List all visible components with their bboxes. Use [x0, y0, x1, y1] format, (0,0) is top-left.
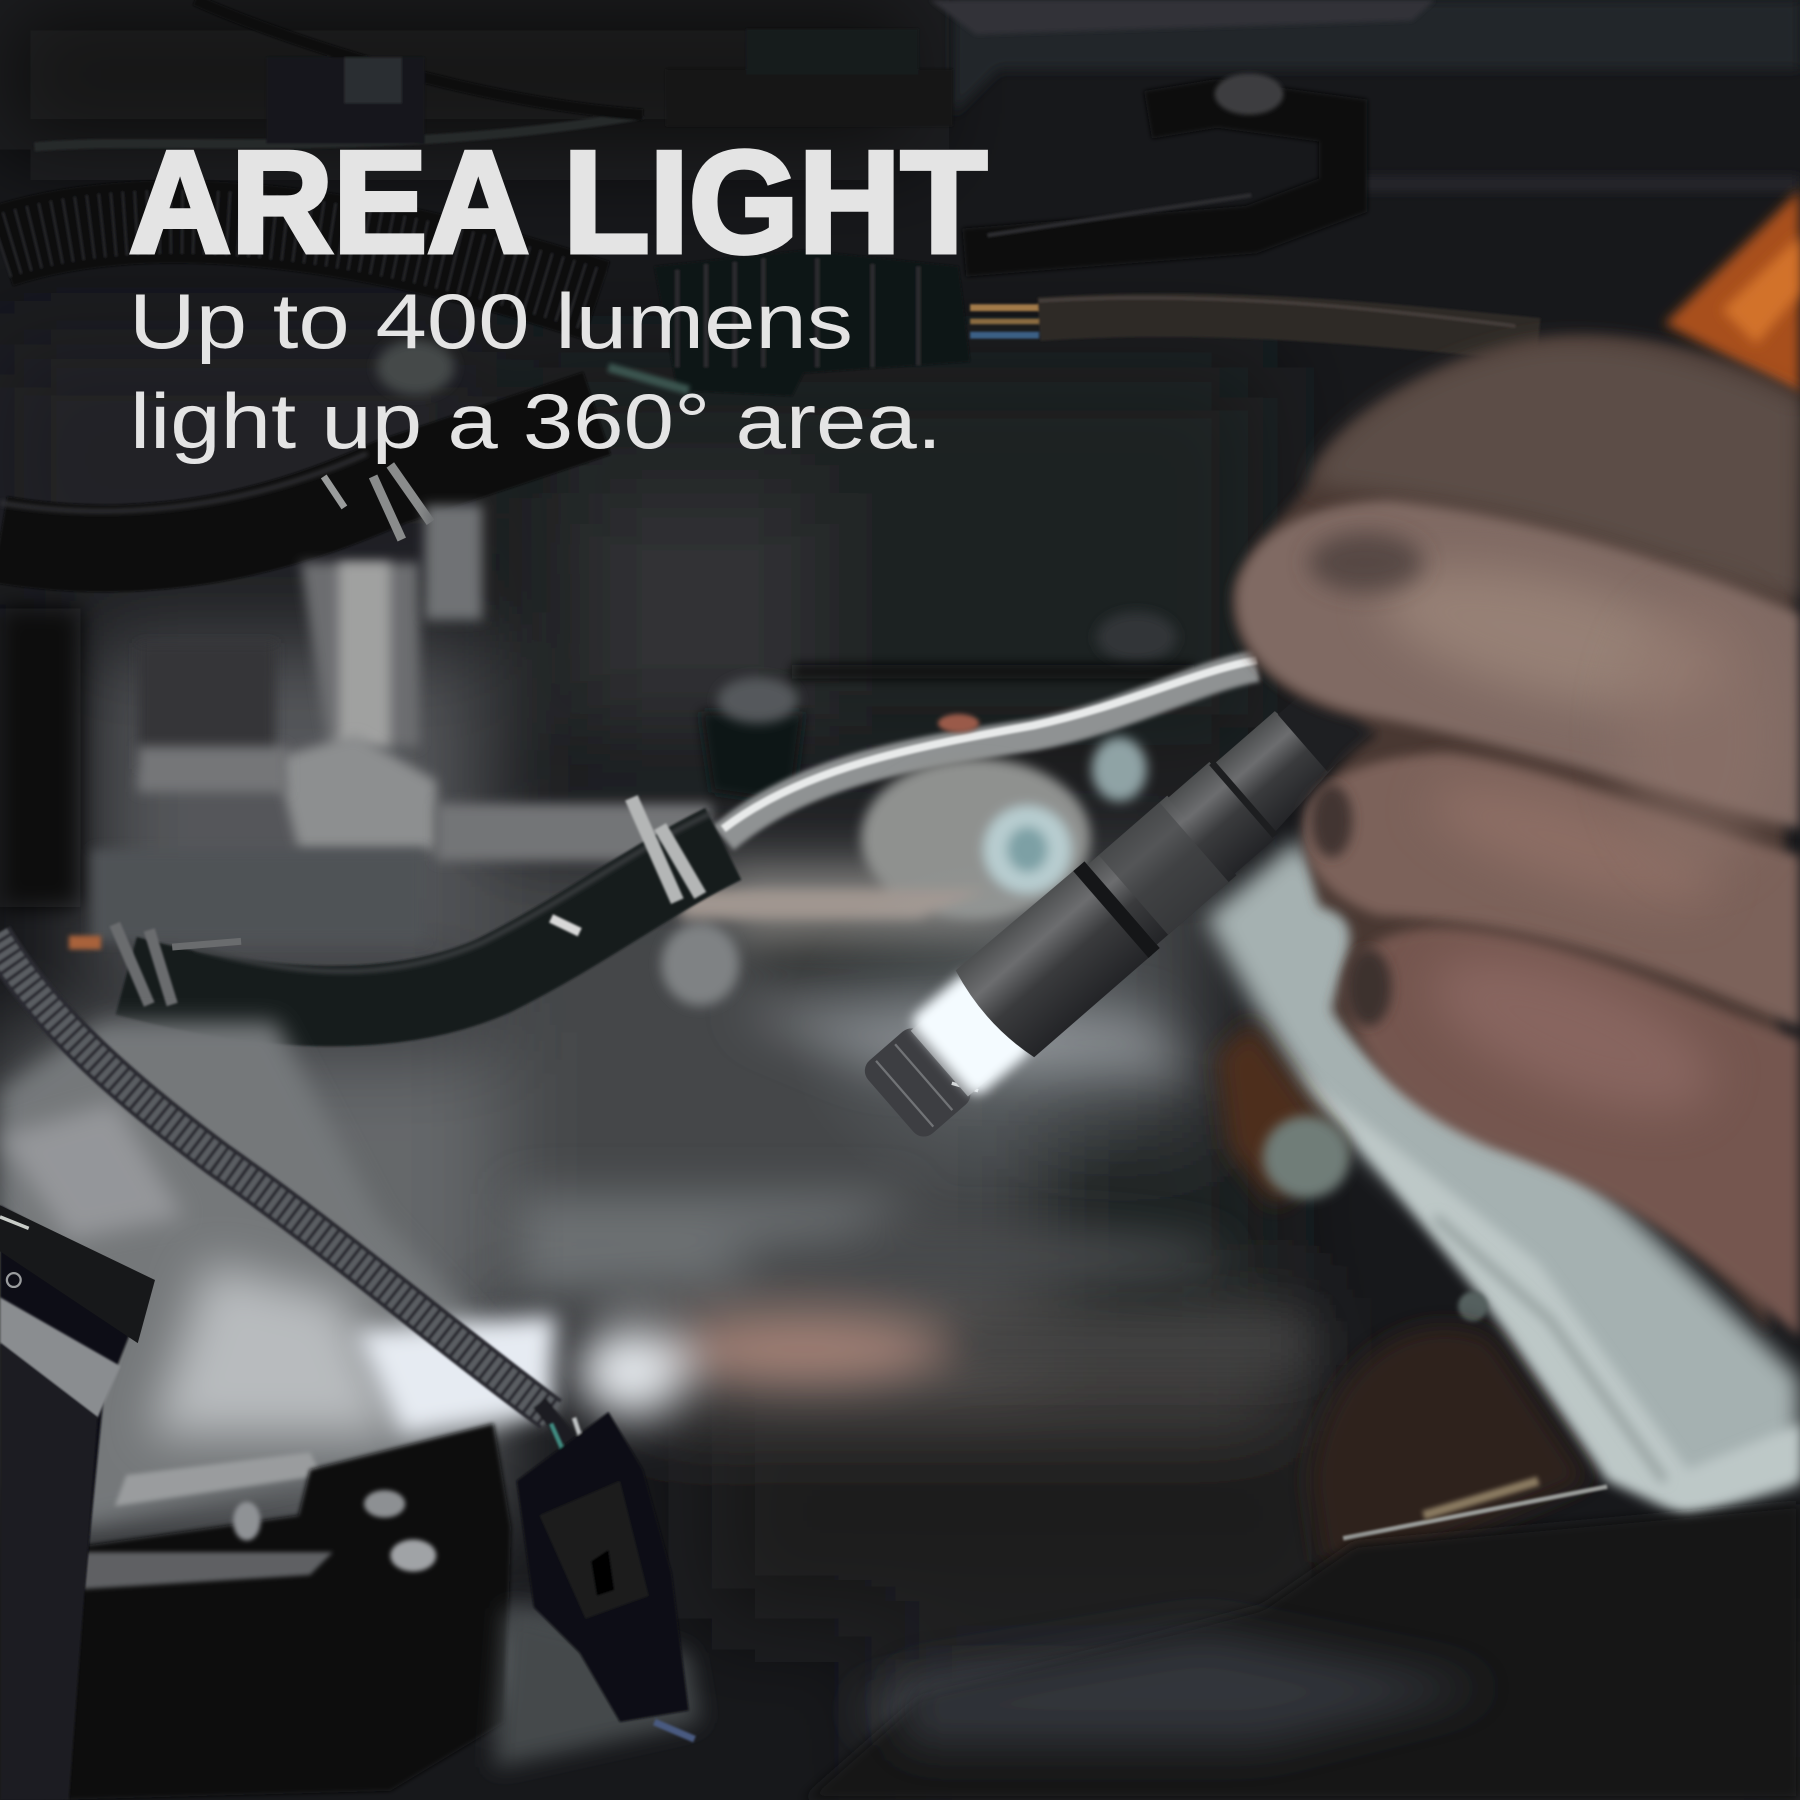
ring finger	[1303, 753, 1800, 1027]
wiring connector	[654, 250, 1538, 396]
subtitle: light up a 360° area.	[130, 377, 942, 465]
black rubber hose	[69, 798, 723, 1006]
index finger	[1311, 341, 1800, 603]
title: AREA LIGHT	[129, 121, 987, 283]
palm mass	[1233, 336, 1800, 1332]
top right dark engine cover	[930, 0, 1800, 253]
silver lower left engine block	[0, 1022, 557, 1527]
subtitle	[129, 277, 942, 465]
subtitle: Up to 400 lumens	[129, 277, 853, 365]
light glow around flashlight	[786, 861, 1200, 1205]
upper black hose with clamp	[0, 340, 689, 548]
lower left machinery	[46, 1424, 700, 1800]
little finger	[1347, 928, 1800, 1337]
round pulley and bolt	[661, 737, 1147, 1006]
rust coloured parts	[804, 1022, 1800, 1800]
bright silver bracket	[723, 660, 1257, 838]
hand holding flashlight	[1233, 336, 1800, 1337]
flashlight head	[951, 866, 1152, 1063]
middle finger	[1237, 501, 1800, 829]
orange tool handle	[1665, 189, 1800, 396]
silver panel behind hand	[1205, 838, 1800, 1515]
braided grey cable	[0, 936, 585, 1460]
striped intake hose at left	[0, 1205, 155, 1800]
top left corrugated hoses	[0, 0, 953, 301]
flashlight barrel	[1168, 762, 1276, 874]
flashlight	[852, 656, 1395, 1149]
black electrical connector	[517, 1412, 695, 1739]
flashlight grip ring	[1073, 792, 1240, 958]
finger highlights and dirt	[1309, 533, 1779, 1142]
flashlight tail bezel	[859, 1005, 997, 1142]
metal pipes in the middle left	[0, 505, 1177, 941]
flashlight glowing LED ring	[908, 970, 1035, 1099]
dark rail behind bracket	[792, 666, 1194, 678]
